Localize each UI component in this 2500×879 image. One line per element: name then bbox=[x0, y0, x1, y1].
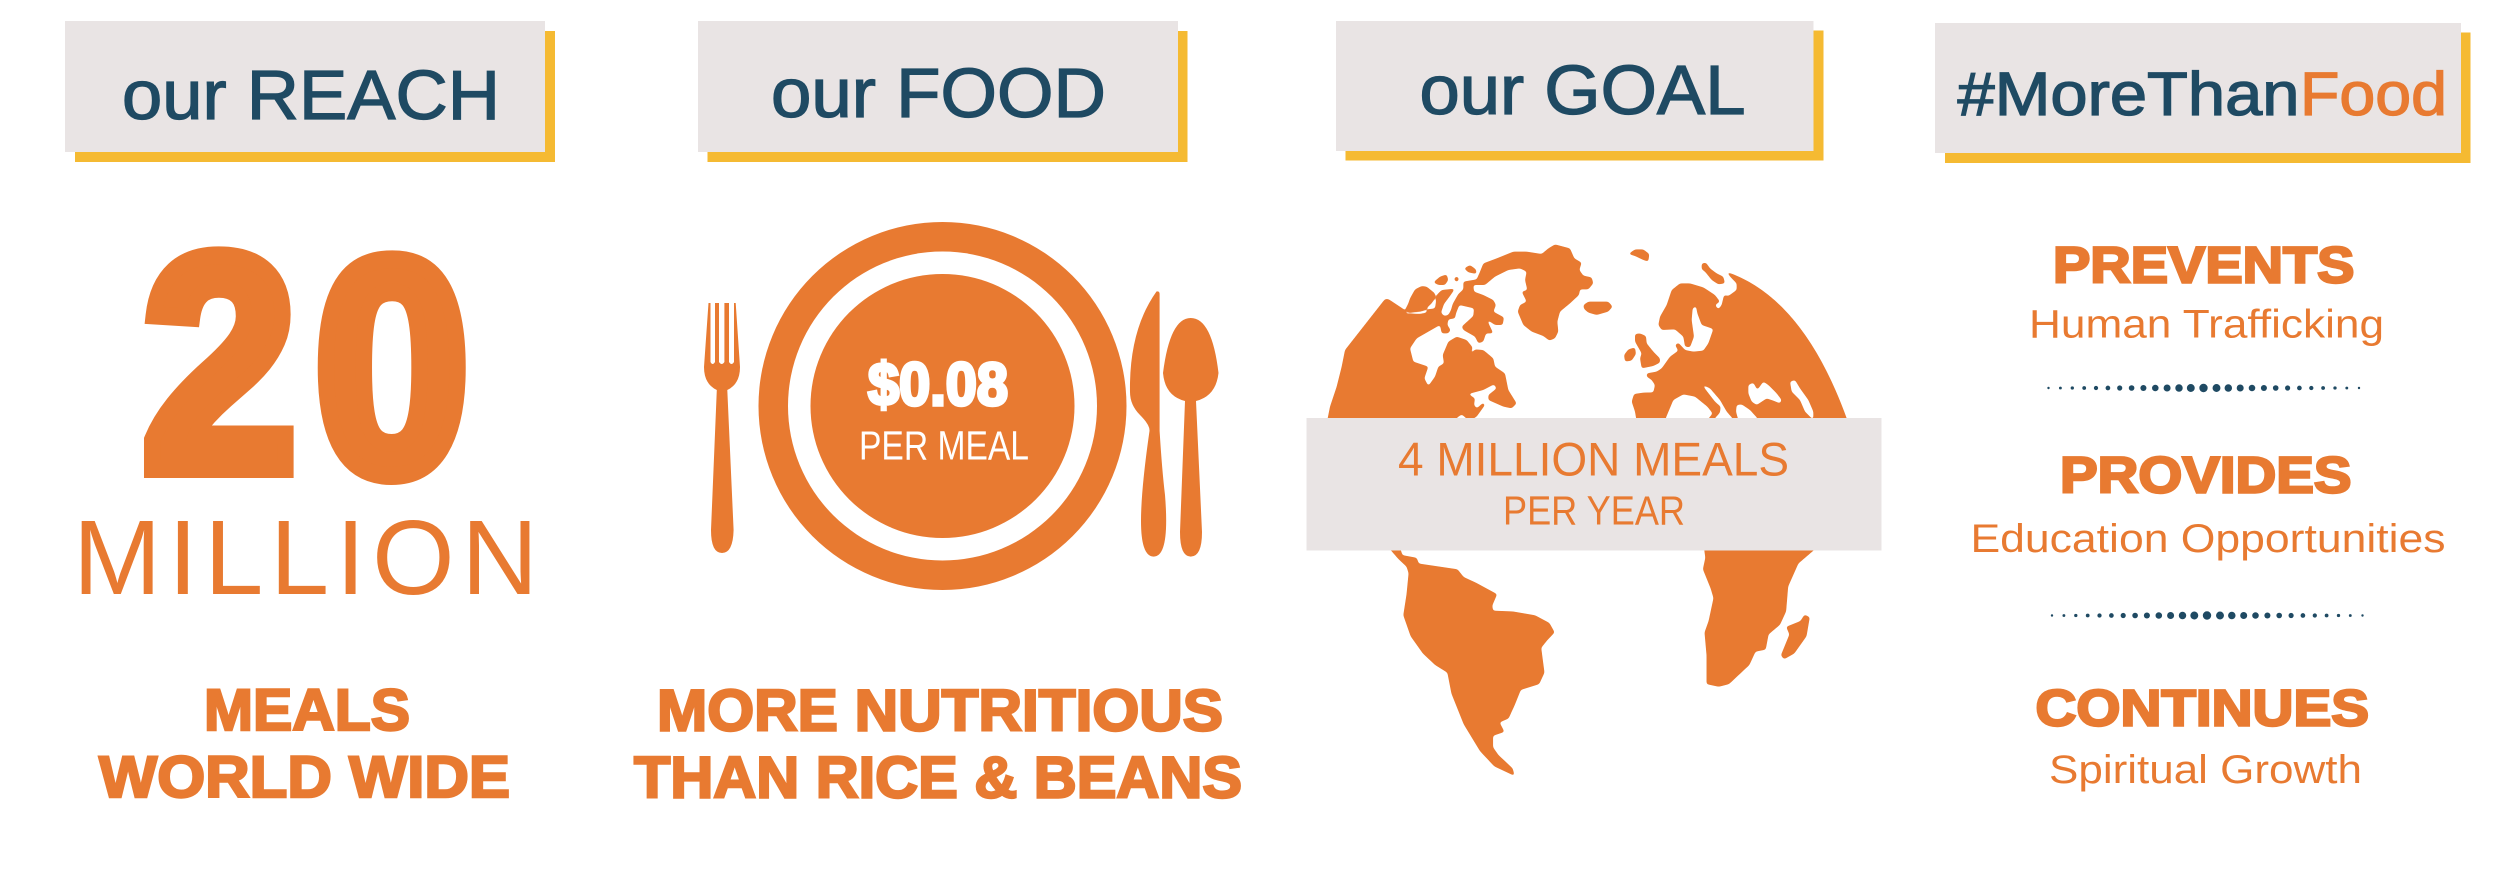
panel: our food bbox=[634, 21, 1242, 810]
item: prevents: Human Trafficking bbox=[2029, 302, 2384, 346]
item: provides: PROVIDES bbox=[2060, 446, 2352, 504]
caption: more nutritious bbox=[634, 678, 1242, 810]
eurasia with inland seas bbox=[1632, 272, 1847, 422]
item: continues: Spiritual Growth bbox=[2049, 748, 2362, 792]
caption: more nutritious: MORE NUTRITIOUS bbox=[657, 678, 1223, 744]
item: prevents bbox=[2029, 236, 2384, 346]
africa bbox=[1703, 543, 1823, 687]
header: our FOOD bbox=[698, 21, 1188, 162]
header: our GOAL bbox=[1336, 21, 1824, 160]
big number 20: 0 bbox=[315, 196, 469, 538]
header: our REACH bbox=[65, 21, 555, 162]
icon: fork bbox=[704, 303, 740, 553]
header: #MoreThanFood: #MoreThan bbox=[1958, 60, 2300, 128]
novaya zemlya bbox=[1702, 263, 1725, 284]
big number 20: 2 bbox=[143, 192, 297, 534]
plate price: $0.08: $0.08 bbox=[868, 351, 1008, 418]
icon: plate bbox=[758, 222, 1126, 590]
britain and ireland bbox=[1624, 333, 1660, 368]
caption: meals world wide: MEALS bbox=[204, 678, 410, 743]
caption: meals world wide: WORLD WIDE bbox=[99, 745, 510, 810]
globe banner: PER YEAR bbox=[1503, 488, 1685, 534]
icon: knife bbox=[1130, 291, 1166, 557]
item: provides: Education Opportunities bbox=[1970, 517, 2446, 561]
item: continues bbox=[2036, 680, 2369, 792]
header: #MoreThanFood: Food bbox=[2300, 60, 2447, 128]
header: our FOOD: our FOOD bbox=[771, 54, 1106, 132]
plate label: per meal: PER MEAL bbox=[859, 422, 1029, 468]
globe banner: 4 MILLION MEALS bbox=[1398, 432, 1789, 486]
item: provides bbox=[1970, 446, 2446, 561]
header: our GOAL: our GOAL bbox=[1420, 51, 1746, 129]
word MILLION: MILLION bbox=[73, 499, 538, 617]
caption: more nutritious: THAN RICE & BEANS bbox=[634, 746, 1242, 810]
north america and greenland bbox=[1327, 244, 1593, 422]
header: #MoreThanFood bbox=[1935, 23, 2470, 163]
item: continues: CONTINUES bbox=[2036, 680, 2369, 736]
icon: spoon bbox=[1163, 318, 1218, 557]
panel: our goal bbox=[1306, 21, 1882, 776]
panel: more than food bbox=[1935, 23, 2470, 792]
panel: our reach bbox=[65, 21, 555, 810]
arctic islands bbox=[1405, 265, 1477, 312]
south america bbox=[1384, 543, 1555, 776]
icon: globe bbox=[1327, 244, 1847, 776]
item: prevents: PREVENTS bbox=[2053, 236, 2354, 294]
caption: meals world wide bbox=[99, 678, 510, 810]
madagascar bbox=[1781, 614, 1810, 659]
iceland bbox=[1583, 302, 1613, 315]
globe banner bbox=[1306, 418, 1882, 550]
svalbard bbox=[1628, 249, 1649, 262]
header: our REACH: our REACH bbox=[122, 56, 500, 134]
